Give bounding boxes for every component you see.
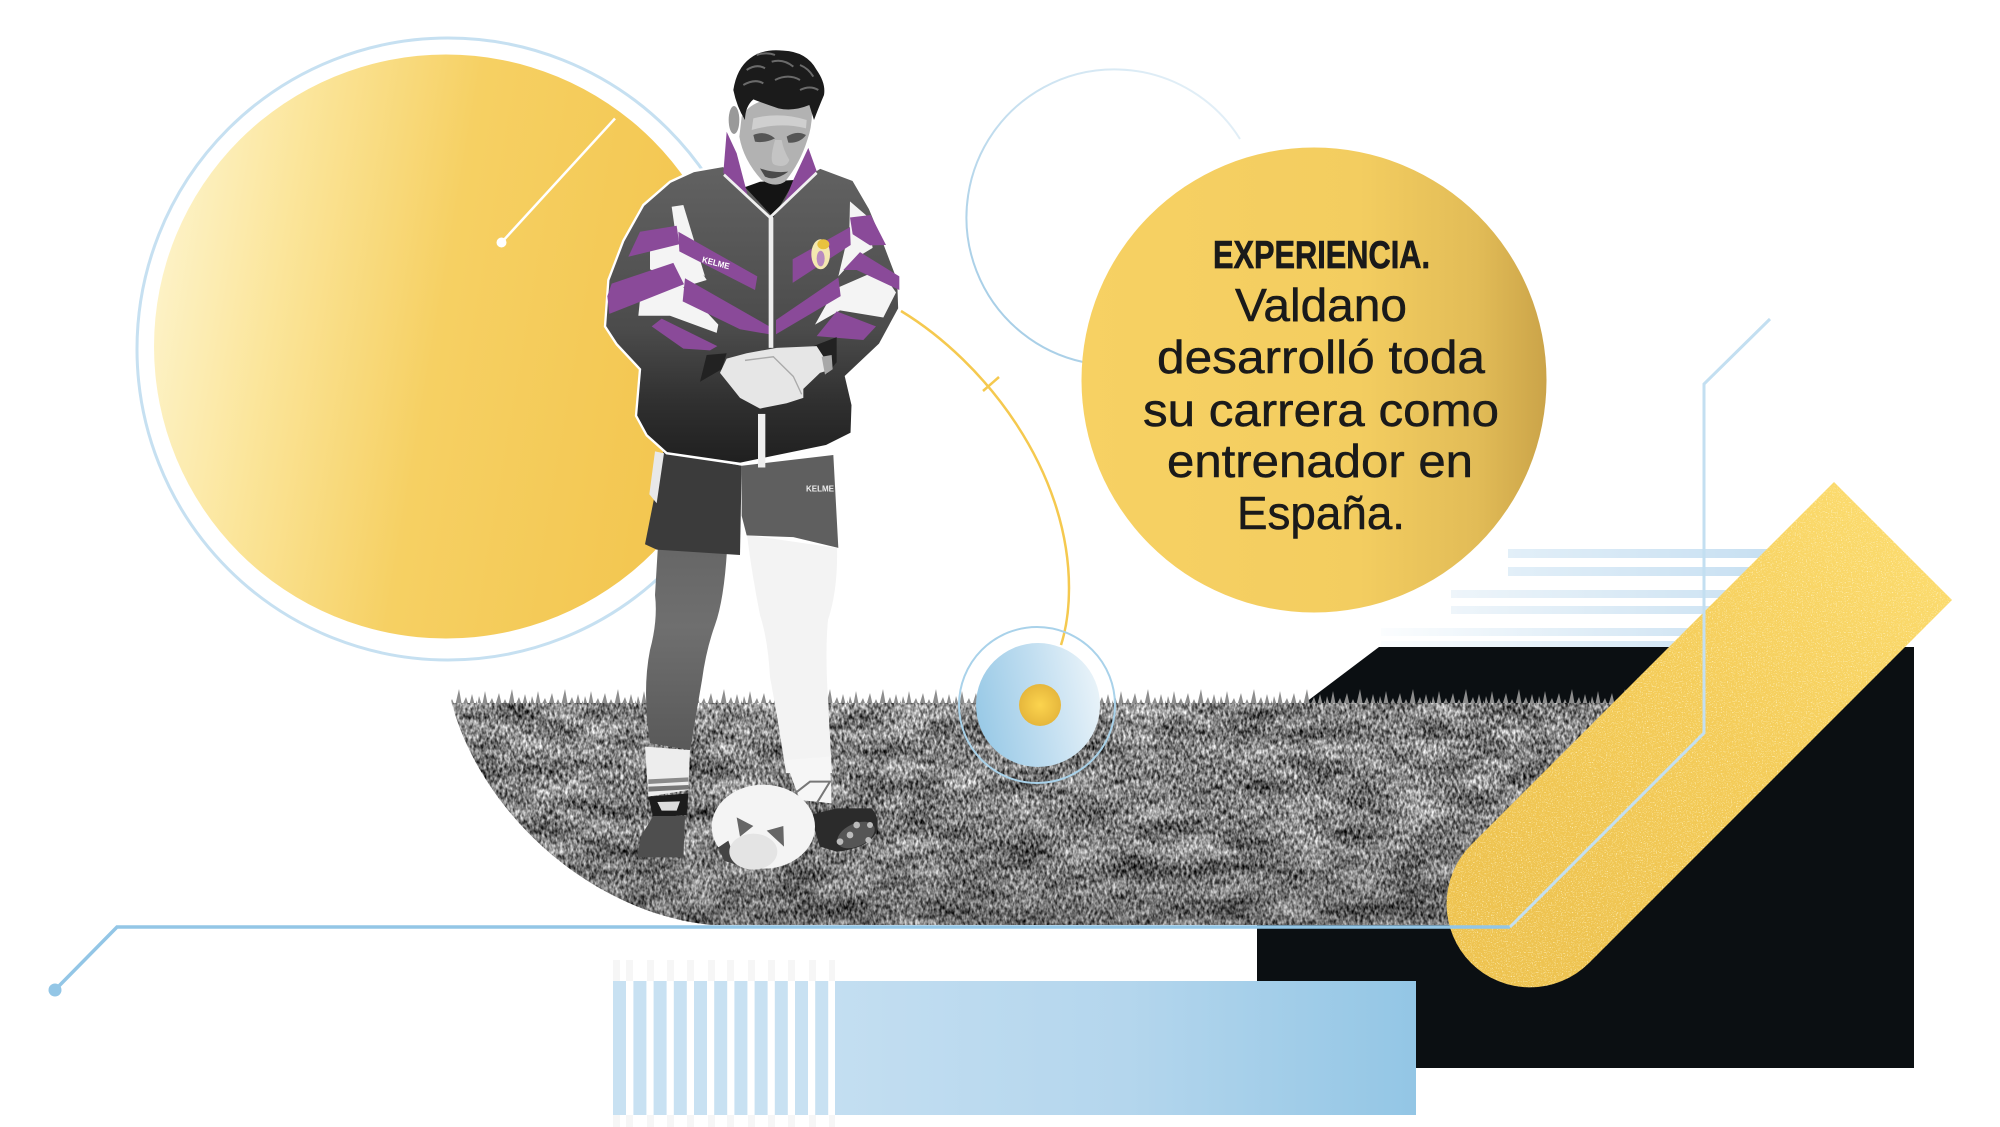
bars (613, 981, 828, 1115)
callout text: entrenador en (1167, 435, 1473, 487)
purple stripes (607, 215, 899, 350)
nose and mouth (772, 140, 789, 166)
callout text: Valdano (1235, 279, 1407, 331)
blue connector line (48, 319, 1770, 996)
light segment (1510, 319, 1770, 927)
shorts (645, 451, 838, 555)
collar and neck (723, 132, 817, 217)
solid block (835, 981, 1416, 1115)
callout text (1143, 234, 1499, 539)
yellow arc connector (901, 311, 1069, 645)
yellow disc (1082, 148, 1546, 612)
faint gap marks (613, 960, 835, 1127)
faint blue stripes (1381, 549, 1838, 647)
left boot (637, 816, 685, 857)
grass field (440, 688, 1680, 928)
hair (733, 50, 824, 120)
left leg (646, 545, 727, 750)
club crest (811, 239, 830, 269)
right leg (747, 535, 837, 773)
large yellow circle (137, 38, 759, 660)
yellow disc (154, 54, 738, 638)
right sock (785, 757, 832, 803)
thin blue arc behind callout (966, 69, 1240, 362)
outer blue ring (137, 38, 759, 660)
dark segment (55, 927, 1510, 990)
callout text: desarrolló toda (1157, 331, 1485, 383)
face (739, 100, 812, 185)
callout circle (1082, 148, 1546, 612)
callout text: España. (1237, 487, 1405, 539)
eye shadows (753, 133, 806, 143)
jacket (605, 166, 899, 467)
end dot (48, 984, 62, 996)
head (729, 50, 824, 185)
hands and cuffs (700, 337, 837, 409)
blue gradient bar (613, 960, 1416, 1127)
zipper (758, 216, 773, 467)
yellow centre (1019, 684, 1061, 726)
white pointer line with dot (496, 118, 615, 248)
upper body (605, 132, 899, 555)
callout text: EXPERIENCIA. (1213, 234, 1430, 277)
callout text: su carrera como (1143, 384, 1499, 436)
yellow diagonal pill (1447, 482, 1952, 987)
blue target circle (959, 627, 1115, 783)
blue disc (976, 643, 1100, 767)
left sock (645, 747, 690, 797)
outer ring (959, 627, 1115, 783)
boots and ball (637, 747, 879, 870)
left ankle band (648, 793, 688, 817)
right boot (810, 808, 878, 852)
ear (729, 106, 739, 134)
white sleeve panels (638, 201, 896, 333)
person: footballer (605, 50, 899, 870)
shorts: KELME (806, 483, 834, 493)
ball (712, 785, 815, 869)
chest logo: KELME (701, 254, 731, 272)
black angular block (1257, 647, 1914, 1068)
